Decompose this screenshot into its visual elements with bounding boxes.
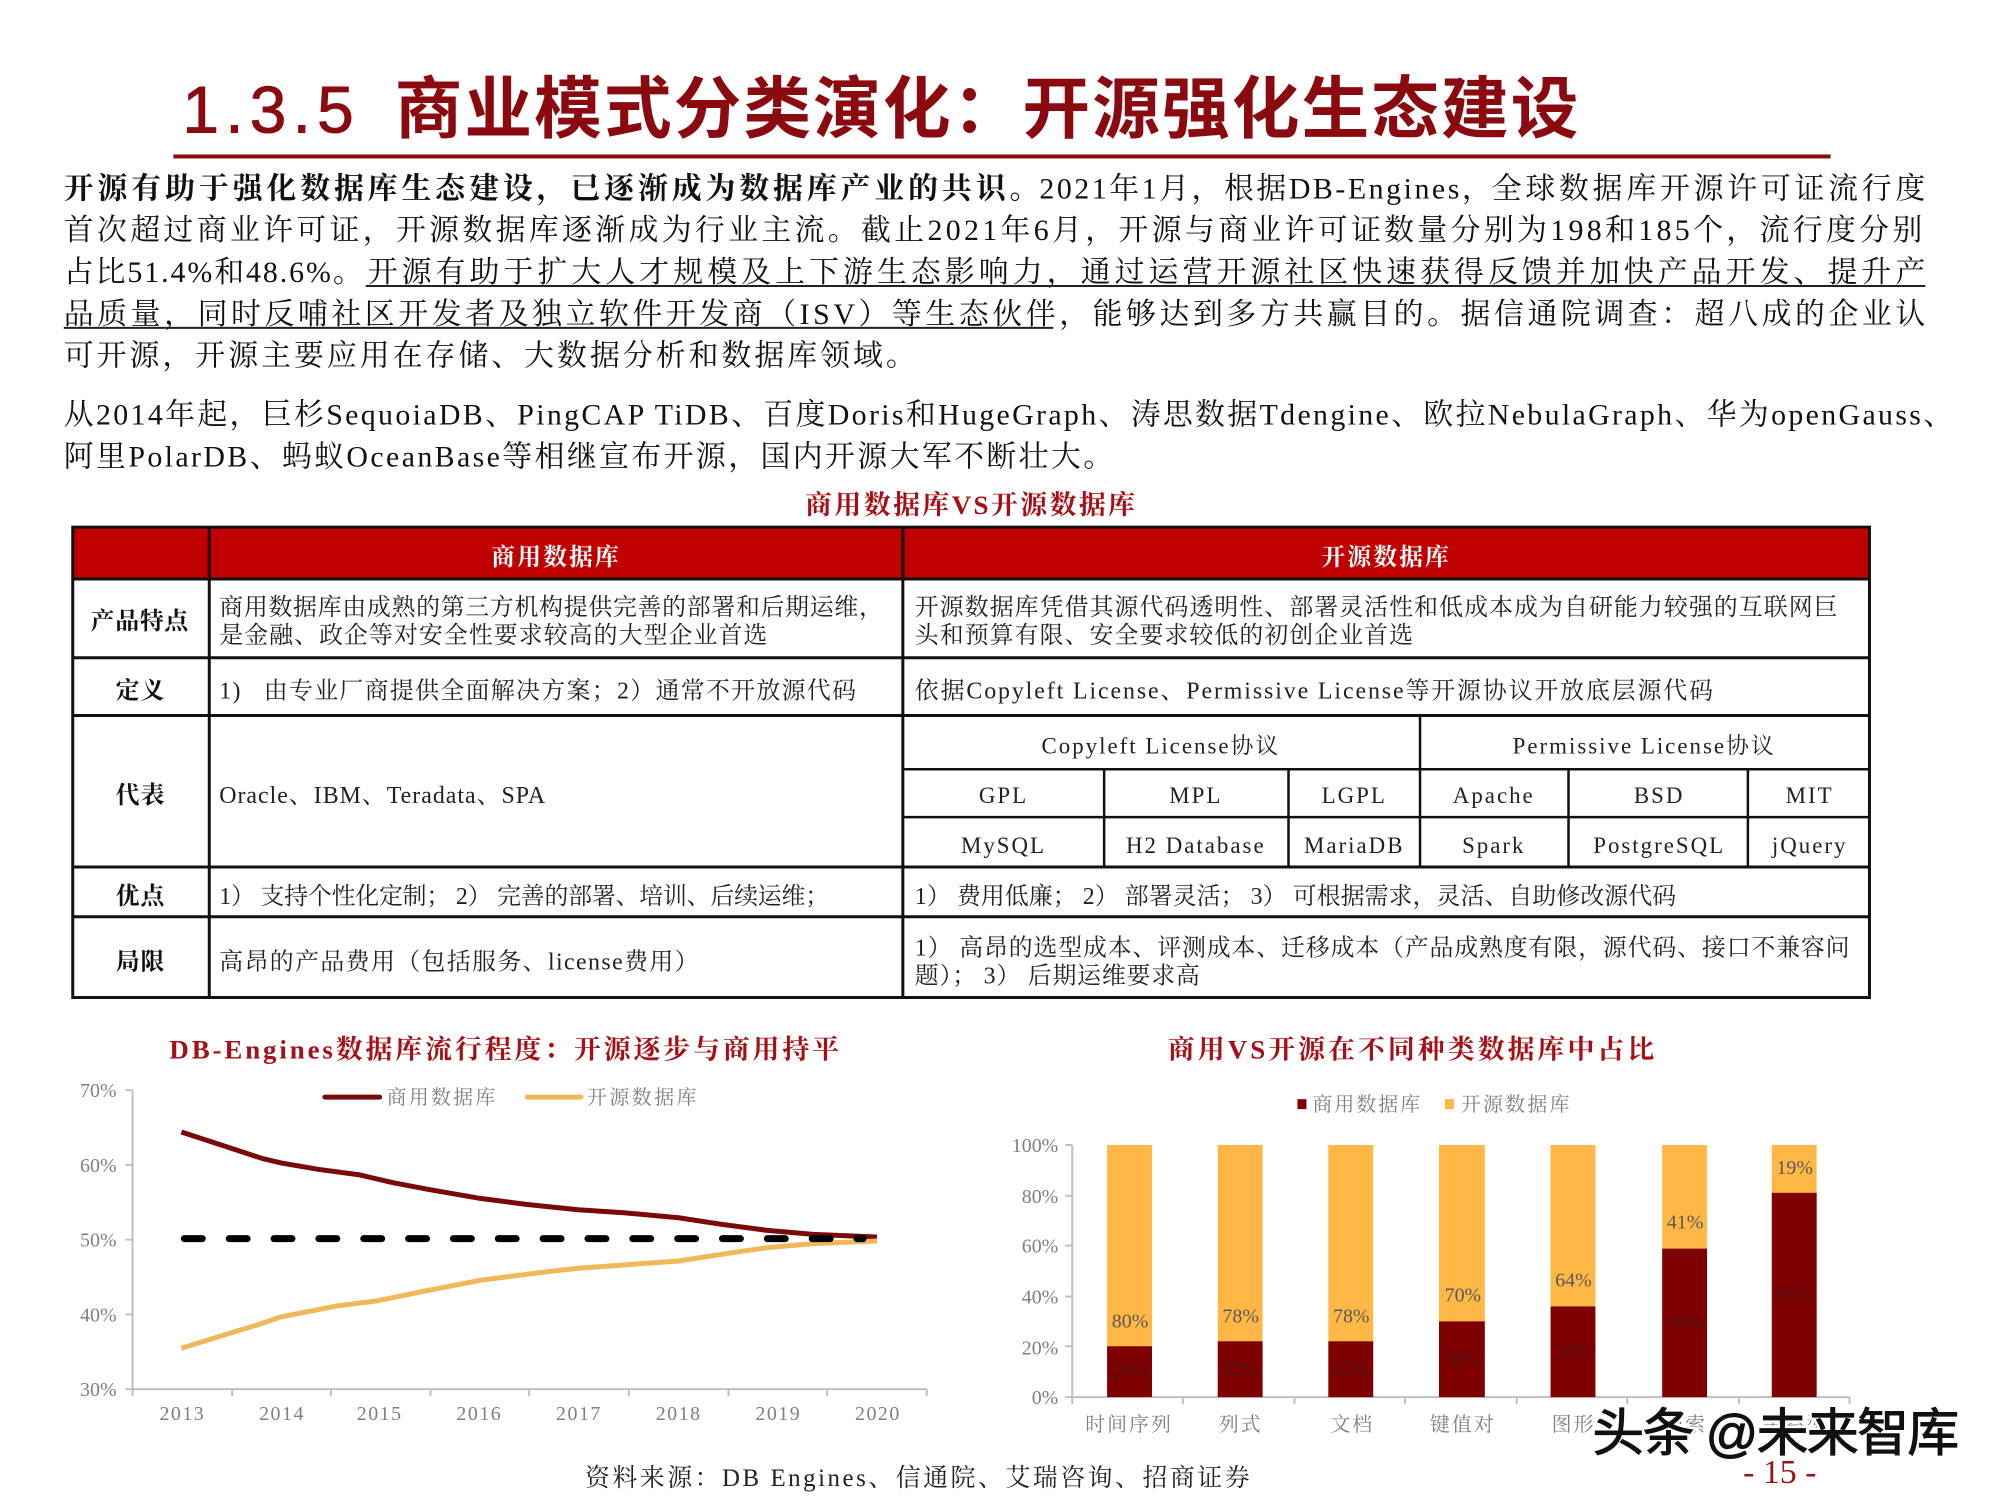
x axis labels: 2013: [159, 1403, 205, 1425]
open source column text: 依据Copyleft License、Permissive License等开源协议开放底层源代码: [915, 678, 1713, 705]
row labels: 优点: [116, 882, 167, 910]
y axis labels: [1012, 1135, 1058, 1409]
text block: intro paragraph: 首次超过商业许可证，开源数据库逐渐成为行业主流。截止2021年6月，开源与商业许可证数量分别为198和185个，流行度分别: [64, 214, 1922, 247]
y axis labels: 20%: [1022, 1337, 1058, 1359]
line chart: popularity trend: [80, 1080, 927, 1425]
license sub-table: jQuery: [1771, 833, 1847, 858]
license sub-table: MPL: [1169, 783, 1222, 808]
y axis labels: 0%: [1032, 1387, 1058, 1409]
x axis labels: 2017: [556, 1403, 602, 1425]
row labels: 产品特点: [91, 607, 190, 635]
license sub-table: Permissive License协议: [1513, 733, 1776, 758]
commercial value labels: 22%: [1222, 1359, 1259, 1381]
text block: intro paragraph: 可开源，开源主要应用在存储、大数据分析和数据库领域。: [64, 340, 916, 373]
axes: [1065, 1145, 1850, 1404]
y axis labels: 60%: [80, 1155, 117, 1177]
open source column text: 1） 费用低廉； 2） 部署灵活； 3） 可根据需求，灵活、自助修改源代码: [915, 883, 1676, 910]
commercial value labels: 20%: [1112, 1361, 1148, 1383]
y axis labels: 60%: [1022, 1236, 1058, 1258]
license sub-table: Apache: [1453, 783, 1535, 808]
open source value labels: 70%: [1445, 1284, 1481, 1306]
series: commercial: [181, 1132, 877, 1237]
y axis labels: 30%: [80, 1379, 117, 1401]
x axis labels: 列式: [1219, 1413, 1263, 1436]
text block: intro paragraph: 开源有助于强化数据库生态建设，已逐渐成为数据库产业的共识。: [64, 171, 1039, 206]
title: 1.3.5: [182, 73, 354, 147]
table: commercial vs open source databases: [73, 527, 1869, 998]
license sub-table: BSD: [1634, 783, 1684, 808]
commercial value labels: 30%: [1445, 1349, 1481, 1371]
text block: intro paragraph: 全球数据库开源许可证流行度: [1492, 172, 1925, 205]
open source value labels: 78%: [1333, 1305, 1370, 1327]
license sub-table: MariaDB: [1304, 833, 1404, 858]
table header row: 开源数据库: [1321, 543, 1451, 571]
series: open source: [181, 1241, 877, 1348]
text block: intro paragraph: 品质量，同时反哺社区开发者及独立软件开发商（ISV）等生态伙伴，能够达到多方共赢目的。据信通院调查：超八成的企业认: [64, 298, 1925, 331]
watermark: 头条 @未来智库: [1592, 1404, 1959, 1462]
text block: domestic open source paragraph: 从2014年起，巨杉SequoiaDB、PingCAP TiDB、百度Doris和HugeGraph、涛思数据Tdengine、欧拉NebulaGraph、华为openGauss、: [64, 399, 1953, 432]
text block: intro paragraph: 2021年1月，根据DB-Engines，: [1039, 172, 1492, 205]
text block: intro paragraph: [64, 171, 1925, 373]
legend: 商用数据库: [1312, 1093, 1420, 1116]
legend: 开源数据库: [587, 1086, 697, 1109]
table grid: [73, 527, 1869, 998]
commercial column text: 1） 支持个性化定制； 2） 完善的部署、培训、后续运维；: [219, 883, 829, 910]
x axis labels: [1085, 1413, 1829, 1436]
stacked bar chart: share by database type: [1012, 1093, 1850, 1436]
x axis labels: 2014: [259, 1403, 305, 1425]
chart title: popularity: DB-Engines数据库流行程度：开源逐步与商用持平: [169, 1033, 839, 1064]
license sub-table: MySQL: [961, 833, 1046, 858]
commercial value labels: 81%: [1776, 1284, 1813, 1306]
commercial column text: [219, 594, 883, 976]
legend: [325, 1086, 697, 1109]
table header row: [73, 527, 1869, 579]
license sub-table: Copyleft License协议: [1042, 733, 1280, 758]
commercial value labels: [1112, 1284, 1813, 1383]
commercial column text: 是金融、政企等对安全性要求较高的大型企业首选: [219, 622, 767, 649]
x axis labels: 搜索: [1663, 1413, 1707, 1436]
text block: intro paragraph: 占比51.4%和48.6%。: [64, 256, 363, 289]
commercial column text: 高昂的产品费用（包括服务、license费用）: [219, 949, 699, 976]
watermark: 头条 @未来智库: [1592, 1404, 1959, 1462]
commercial column text: 商用数据库由成熟的第三方机构提供完善的部署和后期运维，: [219, 594, 883, 621]
x axis labels: 2020: [855, 1403, 901, 1425]
row labels: 局限: [116, 949, 165, 976]
y axis labels: 50%: [80, 1230, 117, 1252]
legend: 开源数据库: [1461, 1093, 1570, 1116]
license sub-table: GPL: [979, 783, 1028, 808]
open source column text: 头和预算有限、安全要求较低的初创企业首选: [915, 622, 1413, 649]
axes: [126, 1090, 927, 1396]
x axis labels: 2019: [755, 1403, 801, 1425]
open source value labels: 19%: [1776, 1157, 1813, 1179]
open source value labels: [1112, 1157, 1813, 1332]
row labels: [91, 607, 190, 976]
y axis labels: 80%: [1022, 1186, 1058, 1208]
table heading: 商用数据库VS开源数据库: [805, 489, 1135, 520]
open source value labels: 78%: [1222, 1305, 1259, 1327]
open source value labels: 64%: [1555, 1269, 1592, 1291]
row labels: 定义: [116, 678, 165, 705]
open source column text: 开源数据库凭借其源代码透明性、部署灵活性和低成本成为自研能力较强的互联网巨: [915, 594, 1838, 621]
open source column text: 题）； 3） 后期运维要求高: [915, 963, 1200, 990]
open source column text: 1） 高昂的选型成本、评测成本、迁移成本（产品成熟度有限，源代码、接口不兼容问: [915, 935, 1850, 962]
open source value labels: 80%: [1112, 1310, 1148, 1332]
license sub-table: LGPL: [1322, 783, 1387, 808]
page number: - 15 -: [1743, 1454, 1816, 1491]
x axis labels: [159, 1403, 901, 1425]
title: 商业模式分类演化：开源强化生态建设: [395, 73, 1578, 148]
table header row: 商用数据库: [491, 543, 621, 571]
x axis labels: 时间序列: [1085, 1413, 1173, 1436]
commercial value labels: 59%: [1667, 1312, 1703, 1334]
open source column text: [915, 594, 1850, 990]
50% dashed reference line: [184, 1235, 863, 1242]
legend: 商用数据库: [387, 1086, 495, 1109]
y axis labels: 40%: [1022, 1286, 1058, 1308]
x axis labels: 2015: [357, 1403, 403, 1425]
commercial column text: Oracle、IBM、Teradata、SPA: [219, 783, 546, 809]
license sub-table: Spark: [1462, 833, 1525, 858]
text block: domestic open source paragraph: [64, 399, 1953, 473]
commercial value labels: 36%: [1555, 1341, 1592, 1363]
x axis labels: 关系型: [1763, 1413, 1829, 1436]
legend: [1297, 1093, 1570, 1116]
x axis labels: 键值对: [1430, 1413, 1496, 1436]
license sub-table: PostgreSQL: [1593, 833, 1725, 858]
x axis labels: 图形: [1552, 1413, 1595, 1436]
commercial value labels: 22%: [1333, 1359, 1370, 1381]
commercial column text: 1) 由专业厂商提供全面解决方案；2）通常不开放源代码: [219, 678, 856, 705]
text block: domestic open source paragraph: 阿里PolarDB、蚂蚁OceanBase等相继宣布开源，国内开源大军不断壮大。: [64, 440, 1113, 473]
source note: 资料来源：DB Engines、信通院、艾瑞咨询、招商证券: [585, 1464, 1250, 1492]
license sub-table: [961, 733, 1847, 858]
bars commercial: [1107, 1193, 1817, 1397]
x axis labels: 文档: [1330, 1413, 1374, 1436]
y axis labels: 40%: [80, 1304, 117, 1326]
y axis labels: 70%: [80, 1080, 117, 1102]
open source value labels: 41%: [1667, 1212, 1703, 1234]
y axis labels: 100%: [1012, 1135, 1058, 1157]
bars open source: [1107, 1145, 1817, 1397]
license sub-table: MIT: [1786, 783, 1834, 808]
title: [173, 73, 1831, 158]
chart title: share by type: 商用VS开源在不同种类数据库中占比: [1168, 1033, 1654, 1064]
x axis labels: 2016: [456, 1403, 502, 1425]
license sub-table: H2 Database: [1126, 833, 1266, 858]
row labels: 代表: [116, 782, 165, 809]
y axis labels: [80, 1080, 117, 1401]
x axis labels: 2018: [656, 1403, 702, 1425]
text block: intro paragraph: 开源有助于扩大人才规模及上下游生态影响力，通过运营开源社区快速获得反馈并加快产品开发、提升产: [368, 256, 1925, 289]
